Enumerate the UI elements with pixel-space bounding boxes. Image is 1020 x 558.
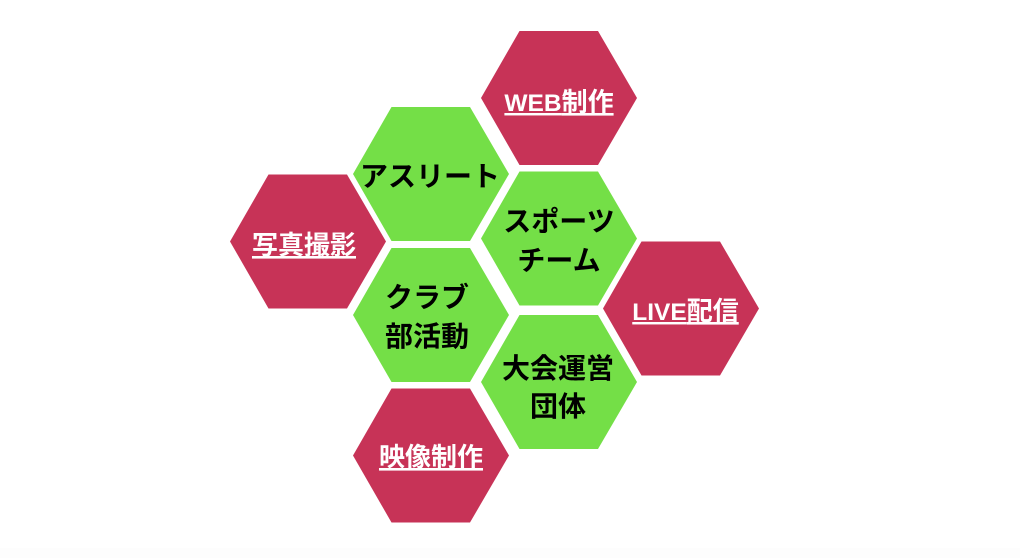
hexagon: LIVE配信 — [603, 242, 759, 376]
hexagon: 大会運営団体: 団体 — [530, 391, 586, 422]
hexagon: スポーツチーム — [481, 172, 637, 306]
hexagon: アスリート — [353, 107, 509, 241]
hexagon: LIVE配信: LIVE配信 — [632, 296, 739, 326]
hexagon: 写真撮影 — [230, 174, 386, 308]
hexagon: クラブ部活動: クラブ — [385, 281, 469, 313]
hexagon: クラブ部活動 — [353, 248, 509, 382]
hexagon: 映像制作: 映像制作 — [379, 442, 483, 472]
hexagon: クラブ部活動: 部活動 — [385, 321, 469, 352]
hexagon: WEB制作 — [481, 31, 637, 165]
hexagon: 大会運営団体 — [481, 315, 637, 449]
hexagon: スポーツチーム: チーム — [517, 245, 601, 276]
hexagon: 写真撮影: 写真撮影 — [252, 230, 356, 260]
hexagon: 大会運営団体: 大会運営 — [502, 353, 614, 384]
hexagon: 映像制作 — [353, 388, 509, 522]
hexagon: WEB制作: WEB制作 — [504, 87, 614, 117]
hexagon: アスリート: アスリート — [360, 161, 500, 192]
hexagon: スポーツチーム: スポーツ — [503, 206, 615, 237]
